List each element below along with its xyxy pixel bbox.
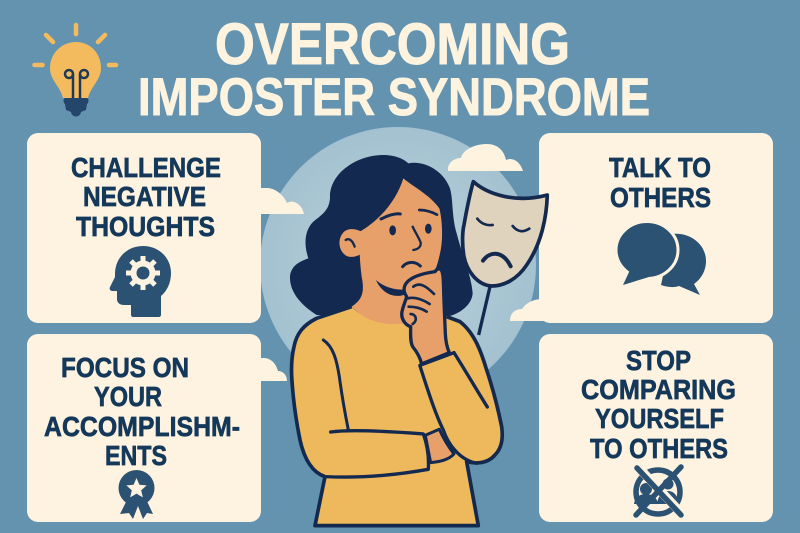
heading: focus on your accomplishments: ENTS xyxy=(105,440,167,471)
heading: talk to others: OTHERS xyxy=(610,182,711,213)
panel: talk to others xyxy=(539,133,773,323)
icon: speech bubbles xyxy=(616,222,706,295)
clouds xyxy=(255,144,555,381)
heading: talk to others xyxy=(609,152,711,213)
title: OVERCOMING xyxy=(215,12,570,77)
illustration: woman holding mask xyxy=(290,155,547,526)
heading: talk to others: TALK TO xyxy=(609,152,711,183)
heading: focus on your accomplishments: FOCUS ON xyxy=(61,352,189,383)
title xyxy=(138,12,650,127)
panel: challenge negative thoughts xyxy=(27,133,261,323)
heading: stop comparing yourself to others: COMPARING xyxy=(581,374,736,405)
heading: challenge negative thoughts xyxy=(71,152,221,242)
heading: stop comparing yourself to others: STOP xyxy=(626,345,691,376)
icon: award ribbon xyxy=(118,470,154,519)
heading: stop comparing yourself to others xyxy=(581,345,736,464)
heading: stop comparing yourself to others: YOURSELF xyxy=(595,403,724,434)
background halo circle xyxy=(260,127,536,403)
right sleeve lines xyxy=(420,353,487,463)
left forearm and tucked hand xyxy=(323,340,454,477)
mask xyxy=(463,182,547,286)
face and neck xyxy=(352,178,442,333)
heading: focus on your accomplishments: YOUR xyxy=(94,381,162,412)
heading: challenge negative thoughts: THOUGHTS xyxy=(76,211,215,242)
heading: challenge negative thoughts: NEGATIVE xyxy=(83,181,206,212)
sweater xyxy=(292,307,502,526)
icon: no comparing xyxy=(634,467,684,516)
raised hand xyxy=(402,269,454,365)
icon: head with gear xyxy=(110,246,171,317)
title: IMPOSTER SYNDROME xyxy=(138,68,650,127)
panel: focus on your accomplishments xyxy=(27,334,261,522)
heading: challenge negative thoughts: CHALLENGE xyxy=(71,152,221,183)
facial features xyxy=(381,210,437,267)
ear xyxy=(339,229,362,257)
heading: focus on your accomplishments: ACCOMPLISHM- xyxy=(44,411,240,442)
panel: stop comparing yourself to others xyxy=(539,334,773,522)
icon: light bulb xyxy=(34,25,116,116)
heading: focus on your accomplishments xyxy=(44,352,240,471)
heading: stop comparing yourself to others: TO OTHERS xyxy=(590,433,728,464)
mask stick xyxy=(479,287,490,335)
hair xyxy=(290,155,473,317)
